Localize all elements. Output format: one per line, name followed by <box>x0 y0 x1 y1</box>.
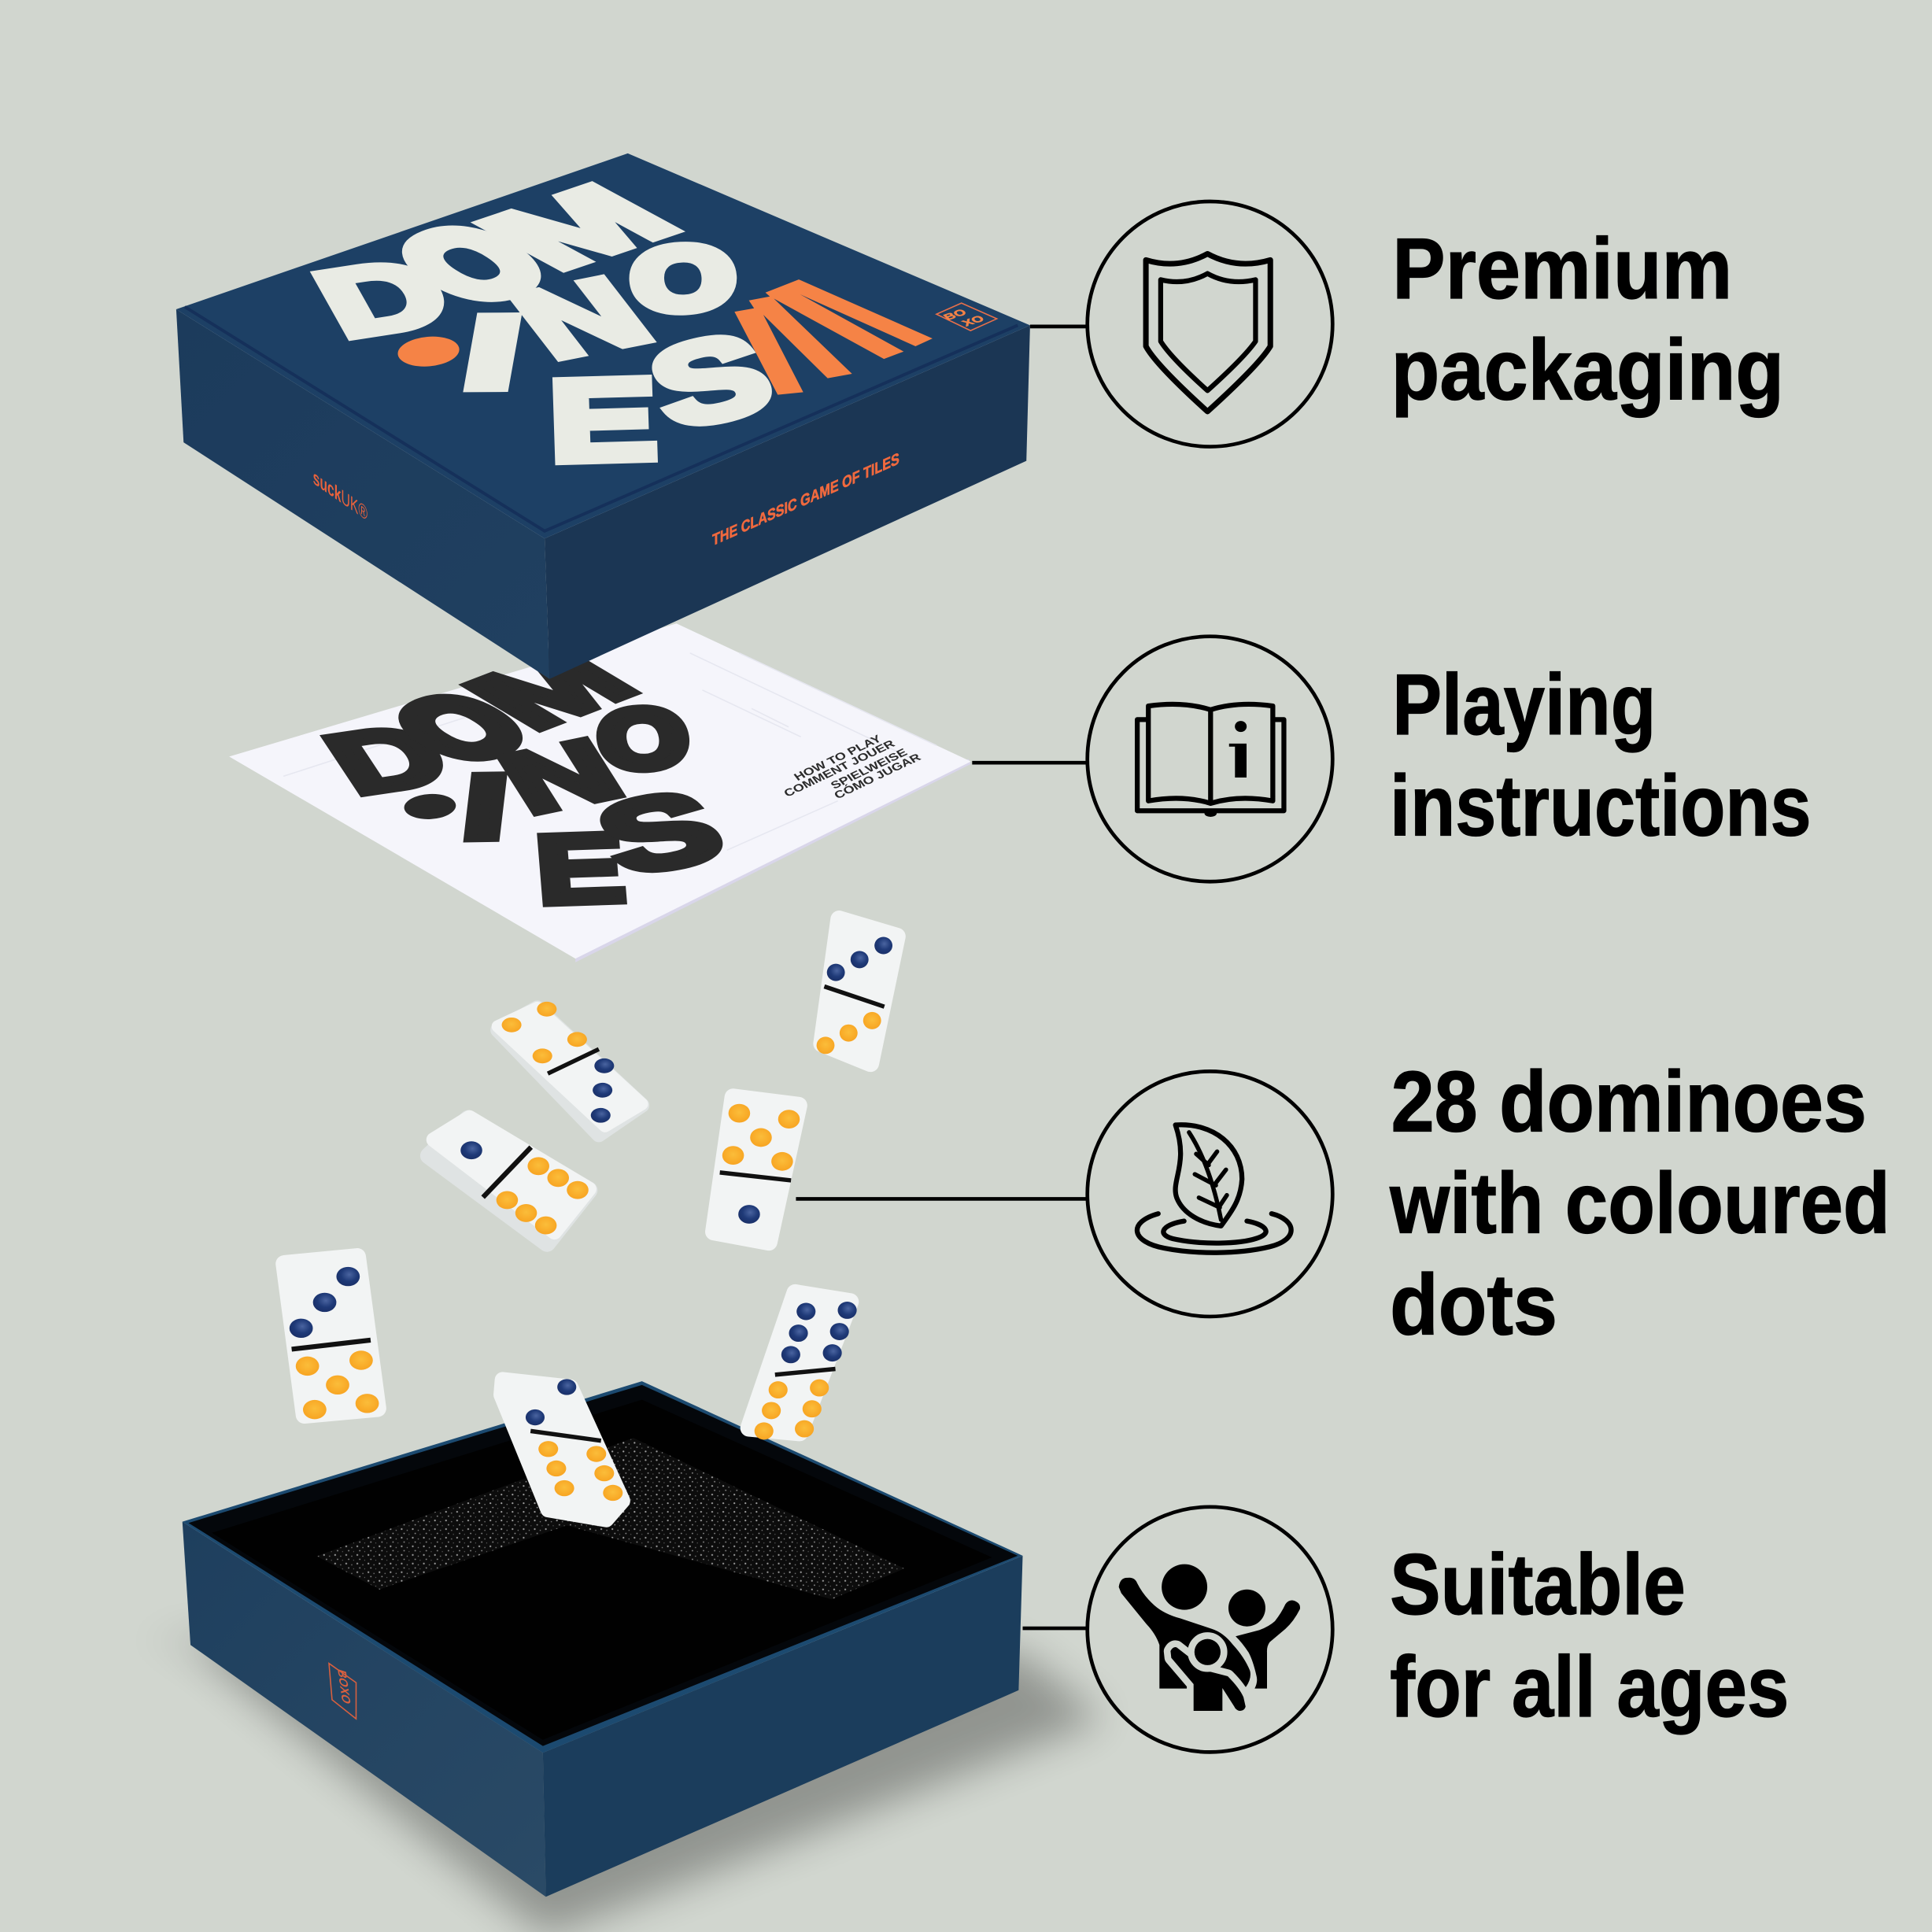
icon: leaf and ripples in circle <box>1088 1071 1332 1317</box>
connector: ages <box>1023 1627 1087 1630</box>
foam insert <box>316 1438 904 1599</box>
connector: instructions <box>972 762 1087 764</box>
booklet title lettering: O <box>592 690 694 787</box>
BOXO side stamp <box>329 1664 356 1719</box>
domino: blue one orange six <box>429 1117 589 1243</box>
icon: info book in circle <box>1088 637 1332 881</box>
label: playing instructions: instructions <box>1390 759 1812 855</box>
connector: dominoes <box>796 1198 1087 1200</box>
orange falling tiles <box>734 279 933 395</box>
lid title lettering: O <box>361 202 582 325</box>
lid title lettering: D <box>297 238 469 357</box>
lid title lettering: M <box>445 168 711 286</box>
booklet title lettering <box>306 633 741 925</box>
booklet title lettering: O <box>361 673 560 782</box>
booklet title lettering: D <box>306 706 468 812</box>
booklet title lettering: I <box>457 755 514 859</box>
BOXO stamp <box>936 303 997 331</box>
booklet title lettering: S <box>579 770 741 896</box>
domino: orange five blue one <box>714 1097 800 1242</box>
lid title lettering <box>297 168 788 486</box>
label: premium packaging: packaging <box>1391 322 1784 418</box>
label: playing instructions <box>1390 657 1812 855</box>
booklet title lettering: N <box>482 721 640 832</box>
lid title lettering: S <box>634 309 788 453</box>
icon: shield in circle <box>1088 201 1332 447</box>
lid title lettering: I <box>454 295 530 411</box>
booklet language lines: SPIELWEISE <box>829 747 910 792</box>
domino: blue six orange six <box>749 1293 857 1439</box>
booklet language lines: HOW TO PLAY <box>792 733 885 783</box>
brand mark: suckUK® <box>313 466 368 526</box>
label: playing instructions: Playing <box>1392 657 1656 753</box>
label: suitable for all ages: Suitable <box>1390 1537 1686 1633</box>
box interior <box>189 1385 1018 1746</box>
label: 28 dominoes with coloured dots: dots <box>1390 1258 1557 1354</box>
lid title lettering: N <box>489 257 673 379</box>
domino: blue two orange six <box>501 1379 622 1519</box>
connector: packaging <box>1030 325 1087 327</box>
orange dot <box>397 334 460 369</box>
booklet language lines: COMMENT JOUER <box>781 738 898 800</box>
label: premium packaging: Premium <box>1392 221 1732 317</box>
lid title lettering: O <box>629 227 738 331</box>
booklet title lettering: E <box>532 814 629 925</box>
label: suitable for all ages: for all ages <box>1390 1639 1789 1735</box>
label: premium packaging <box>1391 221 1784 418</box>
BOXO side stamp: BOXO <box>334 1668 353 1705</box>
label: 28 dominoes with coloured dots: 28 dominoes <box>1391 1054 1867 1150</box>
box lid <box>176 153 1030 679</box>
tagline: THE CLASSIC GAME OF TILES <box>712 450 900 550</box>
instruction booklet <box>229 623 971 962</box>
floor shadow <box>138 1638 1103 1932</box>
domino: blue three orange three <box>817 919 897 1063</box>
BOXO stamp: BO <box>941 308 970 322</box>
domino: orange four blue three <box>498 1002 642 1135</box>
booklet title lettering: M <box>436 633 665 745</box>
icon: family in circle <box>1088 1507 1332 1752</box>
open box base <box>183 1381 1023 1897</box>
booklet language lines: CÓMO JUGAR <box>831 750 924 801</box>
domino: blue three orange five <box>284 1257 379 1419</box>
BOXO stamp: XO <box>960 314 987 328</box>
label: 28 dominoes with coloured dots <box>1389 1054 1890 1354</box>
label: suitable for all ages <box>1390 1537 1789 1735</box>
lid title lettering: E <box>548 354 659 486</box>
